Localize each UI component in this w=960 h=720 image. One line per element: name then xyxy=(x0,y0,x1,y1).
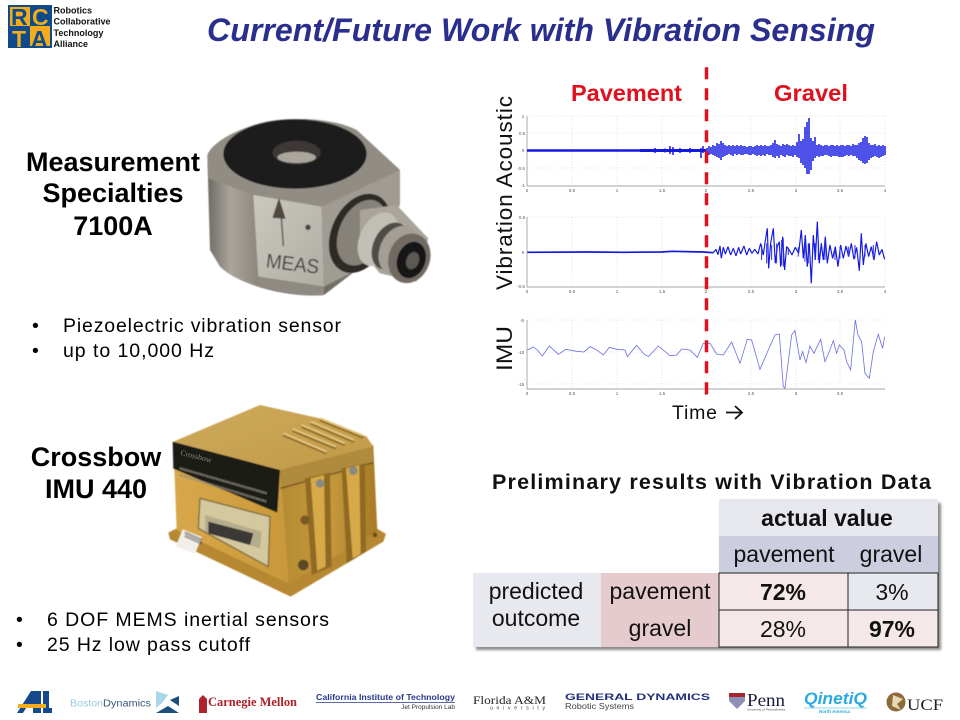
logo: RCTA xyxy=(8,4,111,52)
table: confusion matrix: pavement xyxy=(733,541,835,567)
title: Current/Future Work with Vibration Sensing xyxy=(207,12,875,48)
logo: QinetiQ: North America xyxy=(819,709,850,714)
chart: acoustic waveform: 4 xyxy=(884,188,887,193)
heading: Crossbow IMU 440: IMU 440 xyxy=(45,474,147,504)
axis label: IMU: IMU xyxy=(492,326,517,371)
label: Pavement: Pavement xyxy=(571,80,682,106)
logo: Florida A&M: Florida A&M xyxy=(473,695,546,707)
logo: Florida A&M xyxy=(473,695,546,712)
logo: RCTA: C xyxy=(32,4,49,30)
chart: acoustic waveform: 0 xyxy=(522,148,525,153)
chart: acoustic waveform: 3.5 xyxy=(837,188,844,193)
chart: acoustic waveform: 2.5 xyxy=(748,188,755,193)
chart: acoustic waveform: 3 xyxy=(795,188,798,193)
logo: RCTA: Alliance xyxy=(54,39,88,49)
heading: preliminary results: Preliminary results with Vibration Data xyxy=(492,470,932,494)
logo: Penn: Penn xyxy=(747,690,785,710)
chart: vibration waveform: -0.5 xyxy=(517,284,525,289)
chart: vibration waveform: 1 xyxy=(616,289,619,294)
chart: vibration waveform: 2 xyxy=(705,289,708,294)
logo: RCTA: R xyxy=(11,4,28,30)
chart: IMU waveform: 1.5 xyxy=(659,391,666,396)
chart: vibration waveform: 0 xyxy=(522,250,525,255)
chart: acoustic waveform: 1 xyxy=(522,114,525,119)
logo: RCTA: Robotics xyxy=(54,6,92,16)
bullets: MEAS sensor specs: up to 10,000 Hz xyxy=(63,340,214,362)
divider: red dashed line xyxy=(705,67,708,400)
logo: Penn xyxy=(729,690,785,712)
chart: acoustic waveform: 0.5 xyxy=(569,188,576,193)
logo: Boston Dynamics xyxy=(70,691,179,713)
heading: Measurement Specialties 7100A: 7100A xyxy=(73,211,153,241)
table: confusion matrix: outcome xyxy=(492,605,580,631)
chart: acoustic waveform: 1.5 xyxy=(659,188,666,193)
label: Gravel: Gravel xyxy=(774,80,848,106)
chart: IMU waveform: -5 xyxy=(520,318,524,323)
logo: UCF xyxy=(886,692,943,714)
axis label: Time with arrow xyxy=(672,402,742,424)
chart: IMU waveform: -10 xyxy=(518,350,525,355)
image: Crossbow IMU: Crossbow xyxy=(180,448,213,465)
bullets: MEAS sensor specs: • xyxy=(32,340,39,362)
chart: IMU waveform: 0.5 xyxy=(569,391,576,396)
chart: IMU waveform: 0 xyxy=(526,391,529,396)
table: confusion matrix: predicted xyxy=(489,578,583,604)
chart: acoustic waveform: -0.5 xyxy=(517,166,525,171)
heading: Measurement Specialties 7100A: Measurement xyxy=(26,147,200,177)
image: Crossbow IMU xyxy=(168,405,386,597)
logo: RCTA: A xyxy=(31,26,48,52)
table: confusion matrix: 72% xyxy=(760,579,806,605)
chart: vibration waveform: 1.5 xyxy=(659,289,666,294)
logo: Caltech JPL xyxy=(316,692,455,711)
table: confusion matrix: 28% xyxy=(760,616,806,642)
logo: Caltech JPL: California Institute of Technology xyxy=(316,692,455,702)
logo: QinetiQ: QinetiQ xyxy=(804,689,867,708)
chart: IMU waveform xyxy=(518,318,885,396)
heading: Crossbow IMU 440: Crossbow xyxy=(31,442,162,472)
image: MEAS vibration sensor xyxy=(207,119,437,296)
table: confusion matrix: gravel xyxy=(860,541,922,567)
chart: IMU waveform: 2 xyxy=(705,391,708,396)
bullets: MEAS sensor specs: Piezoelectric vibration sensor xyxy=(63,315,342,337)
chart: vibration waveform: 3 xyxy=(795,289,798,294)
bullets: IMU specs: 6 DOF MEMS inertial sensors xyxy=(47,609,329,631)
bullets: MEAS sensor specs: • xyxy=(32,315,39,337)
chart: acoustic waveform xyxy=(517,114,887,193)
heading: Measurement Specialties 7100A xyxy=(26,147,200,241)
logo: RCTA: Technology xyxy=(54,28,103,38)
table: confusion matrix: 3% xyxy=(875,579,909,605)
table: confusion matrix xyxy=(473,499,941,650)
axis label: Vibration Acoustic: Vibration Acoustic xyxy=(492,96,517,290)
chart: acoustic waveform: -1 xyxy=(521,183,525,188)
bullets: IMU specs: • xyxy=(16,609,23,631)
chart: IMU waveform: -15 xyxy=(518,382,525,387)
bullets: IMU specs xyxy=(16,609,329,656)
chart: vibration waveform: 0.5 xyxy=(519,215,526,220)
table: confusion matrix: pavement xyxy=(609,578,711,604)
heading: Crossbow IMU 440 xyxy=(31,442,162,504)
chart: acoustic waveform: 1 xyxy=(616,188,619,193)
axis label: Time with arrow: Time xyxy=(672,402,717,424)
chart: vibration waveform: 0 xyxy=(526,289,529,294)
logo: Penn: University of Pennsylvania xyxy=(747,708,785,712)
logo: RCTA: T xyxy=(12,26,26,52)
table: confusion matrix: 97% xyxy=(869,616,915,642)
heading: Measurement Specialties 7100A: Specialties xyxy=(42,178,184,208)
chart: vibration waveform: 3.5 xyxy=(837,289,844,294)
chart: acoustic waveform: 2 xyxy=(705,188,708,193)
chart: IMU waveform: 2.5 xyxy=(748,391,755,396)
chart: IMU waveform: 1 xyxy=(616,391,619,396)
chart: IMU waveform: 3 xyxy=(795,391,798,396)
logo: General Dynamics: Robotic Systems xyxy=(565,702,634,711)
logo: Florida A&M: university xyxy=(490,706,546,712)
logo: UCF: UCF xyxy=(907,697,943,714)
table: confusion matrix: actual value xyxy=(761,505,893,531)
logo: Carnegie Mellon: Carnegie Mellon xyxy=(208,694,298,709)
logo: Boston Dynamics: Boston xyxy=(70,698,103,710)
image: MEAS vibration sensor: MEAS xyxy=(265,250,320,279)
chart: IMU waveform: 3.5 xyxy=(837,391,844,396)
chart: acoustic waveform: 0.5 xyxy=(519,131,526,136)
logo: Caltech JPL: Jet Propulsion Lab xyxy=(401,704,455,711)
bullets: MEAS sensor specs xyxy=(32,315,342,362)
chart: vibration waveform: 4 xyxy=(884,289,887,294)
chart: acoustic waveform: 0 xyxy=(526,188,529,193)
chart: vibration waveform: 2.5 xyxy=(748,289,755,294)
bullets: IMU specs: • xyxy=(16,634,23,656)
logo: ARL xyxy=(17,691,52,713)
logo: General Dynamics xyxy=(565,692,710,711)
logo: General Dynamics: GENERAL DYNAMICS xyxy=(565,692,710,702)
table: confusion matrix: gravel xyxy=(629,615,691,641)
logo: RCTA: Collaborative xyxy=(54,16,111,26)
logo: Boston Dynamics: Dynamics xyxy=(103,698,151,710)
chart: vibration waveform xyxy=(517,215,887,294)
bullets: IMU specs: 25 Hz low pass cutoff xyxy=(47,634,251,656)
chart: vibration waveform: 0.5 xyxy=(569,289,576,294)
